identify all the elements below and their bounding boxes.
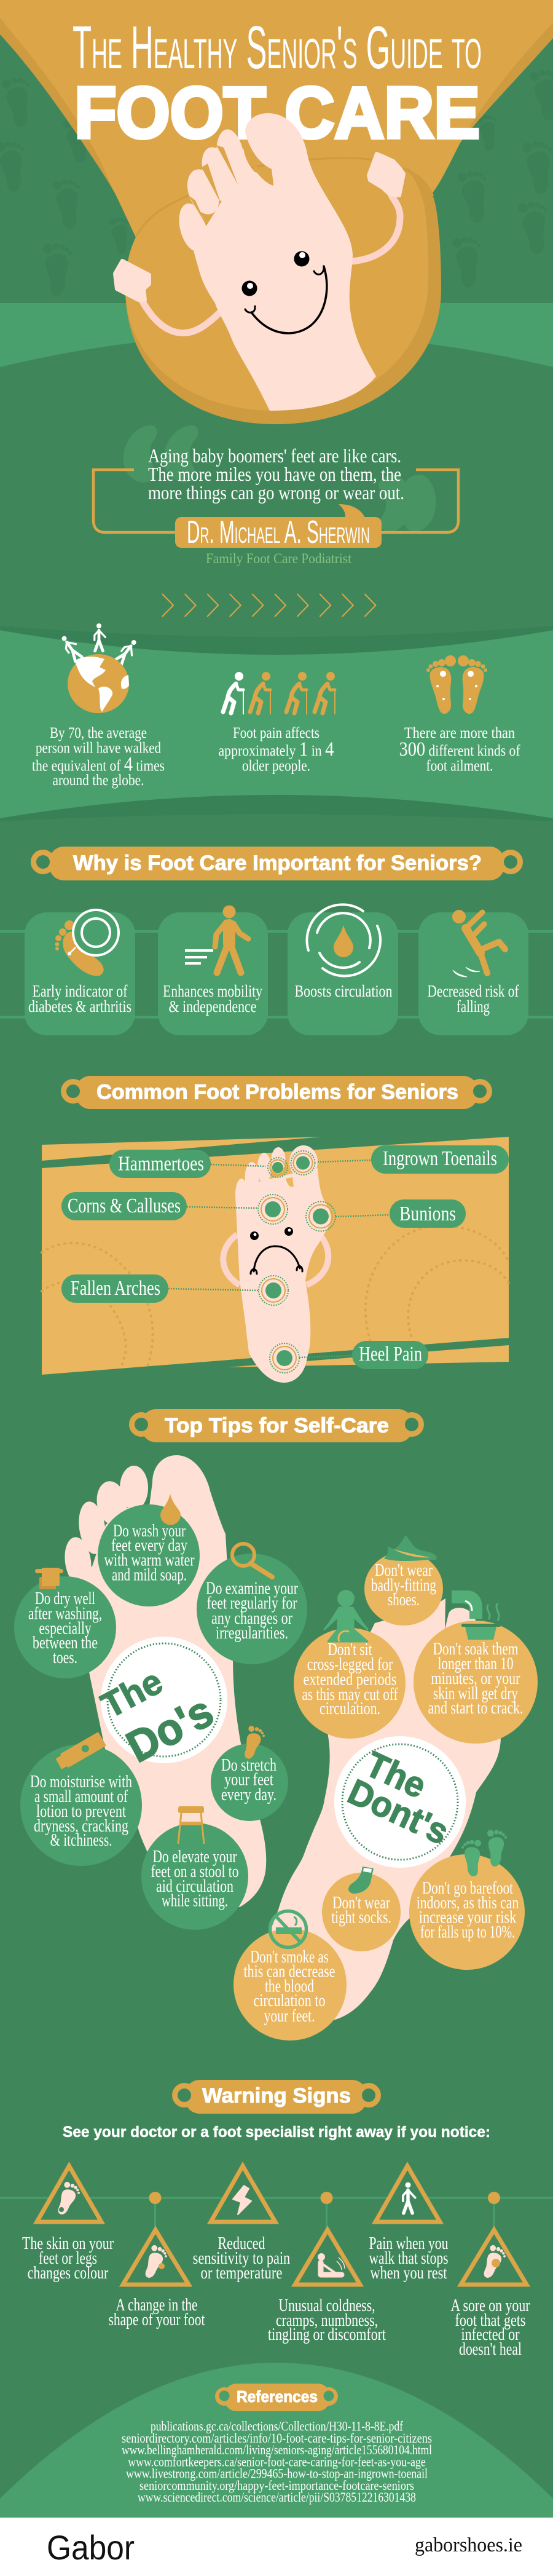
tip: wash: [98, 1494, 200, 1606]
tip: barefoot: increase your risk: [419, 1907, 517, 1927]
reference list: [122, 2419, 432, 2505]
character toes and body: [175, 113, 376, 411]
stat text: ailments: foot ailment.: [426, 757, 493, 775]
connector dotted lines: [168, 1160, 390, 1357]
tip: shoes: [364, 1535, 443, 1626]
tip: cross-legged: [294, 1590, 406, 1739]
tip: tight socks: [322, 1867, 401, 1951]
brand logo: Gabor: [47, 2528, 135, 2567]
icon: pair of feet: [426, 655, 487, 714]
tip: dry: after washing,: [28, 1603, 102, 1623]
stat text: ailments: [399, 725, 520, 775]
the do's badge: [95, 1637, 227, 1772]
icon: globe with walkers: [59, 623, 140, 713]
tip: dry: between the: [33, 1633, 98, 1653]
tip: cross-legged: extended periods: [304, 1670, 397, 1689]
tip: cross-legged: cross-legged for: [307, 1654, 393, 1674]
tip: examine: any changes or: [211, 1608, 292, 1628]
target: heel pain: [270, 1343, 299, 1373]
tip: smoking: Don't smoke as: [250, 1947, 329, 1967]
quote text: [148, 444, 404, 504]
tip: dry: [14, 1568, 116, 1678]
tip: shoes: badly-fitting: [371, 1575, 436, 1595]
warning: shape change: A change in the: [116, 2296, 198, 2315]
don'ts foot shape: [270, 1598, 504, 2020]
reference list: seniordirectory.com/articles/info/10-foot-care-tips-for-senior-citizens: [122, 2430, 432, 2446]
title: [73, 14, 482, 154]
heading: references: References: [237, 2387, 318, 2406]
warning: coldness: Unusual coldness,: [279, 2296, 375, 2315]
target: hammertoes: [268, 1158, 288, 1177]
warning: sensitivity: or temperature: [200, 2264, 283, 2283]
tip: elevate: [141, 1806, 248, 1930]
warning: coldness: [268, 2230, 386, 2344]
tip: moisturise: a small amount of: [34, 1787, 128, 1806]
stat text: seniors: [219, 725, 334, 775]
author role: Family Foot Care Podiatrist: [206, 551, 352, 566]
tip: soaking: skin will get dry: [433, 1684, 518, 1704]
warning: sensitivity: [193, 2166, 290, 2283]
warning: walking pain: walk that stops: [369, 2249, 449, 2268]
panel: foot problems diagram: [42, 1137, 509, 1383]
card: circulation: [288, 904, 398, 1035]
card: mobility: [158, 905, 268, 1035]
tip: moisturise: lotion to prevent: [36, 1801, 126, 1821]
heading: why is foot care important: [31, 847, 523, 880]
tip: smoking: [233, 1911, 347, 2041]
warning: sore: doesn't heal: [459, 2340, 522, 2359]
tip: wash: with warm water: [104, 1551, 195, 1570]
do's foot shape: [62, 1455, 266, 1907]
tip: examine: irregularities.: [216, 1623, 288, 1643]
icon: four seniors: [223, 672, 335, 714]
reference list: publications.gc.ca/collections/Collection/H30-11-8-8E.pdf: [151, 2419, 404, 2433]
card: mobility: Enhances mobility: [163, 982, 262, 1000]
panel: statistics band: [0, 623, 553, 821]
tip: examine: feet regularly for: [206, 1594, 297, 1613]
tip: barefoot: indoors, as this can: [417, 1893, 519, 1913]
label: bunions: Bunions: [399, 1203, 456, 1225]
brand website: gaborshoes.ie: [415, 2534, 522, 2556]
warning: coldness: tingling or discomfort: [268, 2325, 386, 2344]
card: mobility: & independence: [168, 997, 257, 1016]
tip: moisturise: [20, 1732, 142, 1866]
panel: the don'ts foot: [233, 1535, 538, 2041]
tip: soaking: Don't soak them: [433, 1639, 519, 1659]
target: corns: [258, 1195, 288, 1224]
panel: importance cards: [0, 904, 553, 1035]
warning: walking pain: when you rest: [370, 2264, 447, 2283]
tip: stretch: your feet: [224, 1770, 273, 1790]
smiling foot character: [115, 113, 404, 411]
author plate: [175, 504, 382, 550]
reference list: seniorcommunity.org/happy-feet-importance-footcare-seniors: [139, 2478, 414, 2493]
warning: shape change: shape of your foot: [108, 2310, 205, 2329]
heading: common foot problems: [61, 1076, 492, 1109]
reference list: www.livestrong.com/article/299465-how-to-stop-an-ingrown-toenail: [126, 2465, 428, 2481]
label: ingrown toenails: Ingrown Toenails: [383, 1147, 497, 1170]
tip: elevate: feet on a stool to: [151, 1862, 238, 1881]
stat text: ailments: 300 different kinds of: [399, 738, 520, 761]
warning subheading: See your doctor or a foot specialist right away if you notice:: [63, 2124, 490, 2141]
warning: skin colour: The skin on your: [22, 2234, 114, 2253]
panel: quote: [93, 425, 458, 566]
stat text: globe: By 70, the average: [50, 725, 147, 741]
chevron row: [162, 594, 375, 617]
the don'ts badge: The: [359, 1744, 432, 1806]
stat text: ailments: There are more than: [404, 725, 515, 741]
background footprint pattern: [0, 67, 553, 297]
card: falling: [418, 910, 528, 1035]
tip: smoking: this can decrease: [243, 1961, 335, 1981]
tip: elevate: Do elevate your: [152, 1847, 237, 1867]
warning: sore: [451, 2230, 530, 2359]
quote text: more things can go wrong or wear out.: [148, 481, 404, 504]
stat text: globe: person will have walked: [36, 740, 161, 756]
tip: dry: especially: [39, 1619, 92, 1638]
toe gaps: [189, 145, 273, 226]
heading: why is foot care important: Why is Foot Care Important for Seniors?: [73, 851, 482, 875]
hero ground bands: [0, 303, 553, 433]
tip: tight socks: Don't wear: [332, 1893, 390, 1913]
heading: top tips: [129, 1409, 424, 1442]
heading: warning signs: [172, 2080, 381, 2114]
stat text: seniors: Foot pain affects: [233, 725, 320, 741]
tip: soaking: [414, 1590, 538, 1744]
target: ingrown toenails: [291, 1151, 315, 1175]
reference list: www.comfortkeepers.ca/senior-foot-care-caring-for-feet-as-you-age: [128, 2454, 426, 2470]
label: hammertoes: Hammertoes: [118, 1153, 204, 1175]
tip: cross-legged: Don't sit: [328, 1640, 372, 1659]
tip: smoking: your feet.: [264, 2006, 315, 2026]
stat text: globe: [32, 725, 165, 789]
tip: soaking: longer than 10: [437, 1654, 514, 1673]
the don'ts badge: Dont's: [342, 1772, 455, 1852]
quote bracket: [93, 470, 458, 532]
title: FOOT CARE: [74, 73, 480, 154]
quote text: The more miles you have on them, the: [148, 463, 401, 485]
warning: sensitivity: sensitivity to pain: [193, 2249, 290, 2268]
stat text: globe: around the globe.: [53, 772, 144, 789]
label: corns and calluses: [61, 1192, 187, 1220]
the do's badge: Do's: [119, 1686, 221, 1772]
tip: elevate: while sitting.: [162, 1891, 228, 1911]
dotted arcs: [42, 1226, 509, 1367]
hero gold spotlight and oval: [0, 0, 553, 424]
card: circulation: Boosts circulation: [295, 982, 393, 1000]
gold background slashes: [42, 1137, 509, 1375]
warning: sore: infected or: [461, 2325, 520, 2344]
the don'ts badge: [334, 1736, 466, 1868]
tip: shoes: Don't wear: [375, 1560, 433, 1580]
tip: examine: Do examine your: [206, 1579, 298, 1598]
label: bunions: [390, 1199, 466, 1228]
tip: barefoot: [409, 1830, 525, 1970]
label: ingrown toenails: [371, 1145, 509, 1174]
card: early indicator: diabetes & arthritis: [28, 997, 131, 1016]
stat text: seniors: approximately 1 in 4: [219, 738, 334, 761]
tip: dry: Do dry well: [35, 1589, 95, 1608]
tip: soaking: minutes, or your: [431, 1669, 520, 1688]
tip: stretch: every day.: [221, 1785, 276, 1804]
panel: the do's foot: [14, 1455, 307, 1930]
tip: wash: and mild soap.: [112, 1565, 187, 1585]
warning: sensitivity: Reduced: [218, 2234, 265, 2253]
warning: walking pain: Pain when you: [369, 2234, 449, 2253]
target: bunions: [306, 1201, 335, 1231]
card: early indicator: Early indicator of: [32, 982, 128, 1000]
tip: wash: Do wash your: [113, 1521, 186, 1541]
sad foot character: [223, 1145, 331, 1383]
tip: moisturise: Do moisturise with: [30, 1772, 132, 1792]
tip: cross-legged: circulation.: [320, 1699, 380, 1718]
quote text: Aging baby boomers' feet are like cars.: [148, 444, 401, 467]
warning: skin colour: feet or legs: [39, 2249, 97, 2268]
warning: skin colour: changes colour: [28, 2264, 109, 2283]
heading: references: [215, 2384, 338, 2411]
character face: [242, 251, 327, 333]
footer: [0, 2518, 553, 2576]
tip: barefoot: Don't go barefoot: [422, 1878, 513, 1898]
tip: dry: toes.: [53, 1648, 77, 1667]
tip: tight socks: tight socks.: [331, 1907, 391, 1927]
tip: cross-legged: as this may cut off: [302, 1685, 398, 1704]
stat text: globe: the equivalent of 4 times: [32, 754, 165, 776]
tip: moisturise: & itchiness.: [50, 1830, 112, 1850]
tip: soaking: and start to crack.: [428, 1698, 524, 1718]
author plate: Dr. Michael A. Sherwin: [187, 515, 370, 550]
reference list: www.sciencedirect.com/science/article/pii/S0378512216301438: [138, 2489, 416, 2505]
label: heel pain: Heel Pain: [359, 1343, 422, 1365]
warning: skin colour: [22, 2166, 114, 2283]
tip: stretch: Do stretch: [221, 1755, 276, 1775]
reference list: www.bellinghamherald.com/living/seniors-aging/article155680104.html: [122, 2442, 432, 2457]
heading: warning signs: Warning Signs: [202, 2084, 351, 2108]
tip: stretch: [211, 1725, 288, 1821]
tip: examine: [197, 1544, 307, 1664]
card: early indicator: [25, 910, 135, 1035]
tip: smoking: the blood: [265, 1977, 314, 1996]
label: fallen arches: [61, 1274, 168, 1303]
tip: shoes: shoes.: [388, 1590, 420, 1610]
character arms: [141, 196, 400, 333]
target: fallen arches: [259, 1276, 288, 1305]
panel: warning signs row: [0, 2166, 553, 2359]
quote marks: [124, 425, 436, 531]
label: heel pain: [352, 1341, 428, 1369]
warning: coldness: cramps, numbness,: [276, 2311, 378, 2330]
heading: top tips: Top Tips for Self-Care: [165, 1414, 389, 1437]
warning: sore: A sore on your: [451, 2296, 530, 2315]
tip: wash: feet every day: [111, 1536, 187, 1555]
panel: references: [0, 2363, 553, 2518]
stat text: seniors: older people.: [242, 757, 310, 775]
heading: common foot problems: Common Foot Problems for Seniors: [96, 1081, 458, 1104]
character hands: [115, 154, 404, 300]
label: fallen arches: Fallen Arches: [71, 1277, 160, 1300]
tip: smoking: circulation to: [253, 1991, 326, 2010]
warning: shape change: [108, 2230, 205, 2329]
card: falling: Decreased risk of: [428, 982, 519, 1000]
label: corns and calluses: Corns & Calluses: [68, 1195, 181, 1217]
warning: sore: foot that gets: [455, 2311, 526, 2330]
tip: moisturise: dryness, cracking: [34, 1816, 128, 1836]
tip: elevate: aid circulation: [156, 1876, 233, 1896]
card: falling: falling: [457, 997, 490, 1016]
warning: walking pain: [369, 2166, 449, 2283]
label: hammertoes: [109, 1150, 211, 1178]
the do's badge: The: [95, 1661, 169, 1726]
